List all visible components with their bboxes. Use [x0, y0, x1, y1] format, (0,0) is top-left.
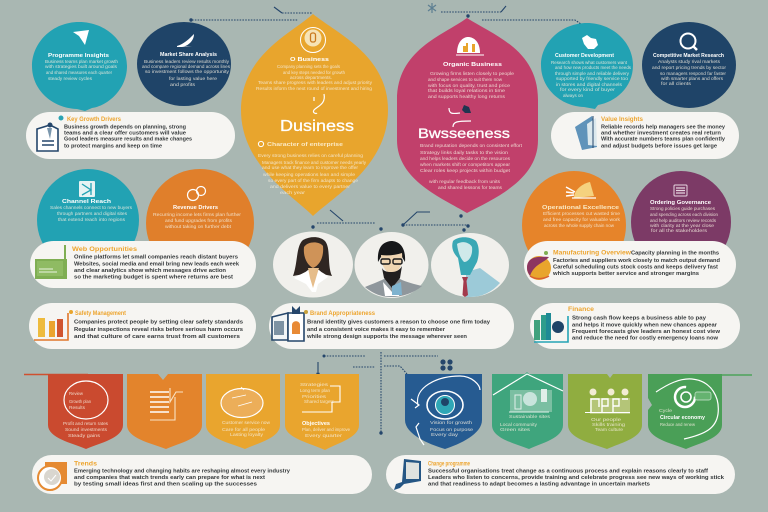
icon: clipboard: [37, 122, 58, 151]
panel: white pill left row 3: and clear analytics show which messages drive action: [74, 268, 226, 274]
panel: purple circle right row 2: and help auditors review records: [650, 218, 717, 223]
panel: white pill right row 4: Frequent forecasts give leaders an honest cost view: [572, 329, 721, 335]
banner lines: [24, 374, 752, 376]
icon: orange check badge: [38, 462, 67, 490]
icon: dome building: [456, 37, 484, 55]
panel: gold leaf business: Managers track finance and customer needs yearly: [262, 160, 367, 165]
panel: lime banner: [568, 374, 642, 449]
panel: white pill right row 4: and reduce the need for costly emergency loans now: [572, 336, 719, 342]
panel: pink leaf business: Organic Business: [443, 62, 502, 68]
panel: white pill right row 4: Finance: [568, 307, 595, 313]
panel: pink leaf business: Brand reputation depends on consistent effort: [420, 143, 523, 148]
panel: white pill centre row 4: [269, 303, 514, 349]
panel: purple circle right row 2: [631, 171, 731, 273]
panel: white pill right row 1: Reliable records help managers see the money: [601, 124, 725, 130]
panel: purple circle right row 2: Ordering Governance: [650, 200, 711, 206]
panel: white pill left row 1: teams and a clear offer customers will value: [64, 130, 186, 136]
panel: white pill left row 1: to protect margins and keep on time: [64, 144, 162, 150]
panel: teal circle left row 2: Channel Reach: [62, 199, 112, 205]
panel: red banner: Review: [69, 391, 84, 396]
panel: gold banner B: Strategies: [300, 382, 329, 387]
panel: pink leaf business: and supports healthy long returns: [428, 94, 506, 99]
panel: teal circle top left: and shared measures each quarter: [46, 70, 112, 75]
panel: white pill right row 1: and whether investment creates real return: [601, 130, 721, 136]
panel: bottom pill right: [386, 455, 735, 494]
panel: white pill right row 1: [551, 112, 739, 159]
panel: navy circle top right: with smarter plans and offers: [661, 76, 724, 81]
panel: white pill left row 3: Online platforms let small companies reach distant buyers: [74, 254, 238, 260]
panel: pink leaf business: with regular feedback from units: [429, 179, 501, 184]
panel: navy circle top right: so managers respond far faster: [660, 71, 726, 76]
panel: gold leaf business: and delivers value to every partner: [270, 184, 351, 189]
panel: teal circle top right: always on: [563, 93, 583, 98]
panel: blue banner: [405, 374, 482, 449]
panel: red banner: Results: [69, 405, 86, 410]
panel: bottom pill left: and companies that watch trends early can prepare for what is next: [74, 475, 265, 481]
panel: white pill left row 4: [29, 303, 256, 349]
icon: chart tile: [79, 181, 95, 197]
panel: teal circle left row 2: through partners and digital sites: [57, 211, 128, 216]
panel: teal circle top right: Customer Development: [555, 53, 614, 59]
panel: bottom pill right: Change programme: [428, 462, 470, 468]
panel: bottom pill left: Emerging technology and changing habits are reshaping almost every industry: [74, 468, 290, 474]
panel: teal circle left row 2: Sales channels connect to new buyers: [50, 205, 133, 210]
panel: white pill right row 3: Careful scheduling cuts stock costs and keeps delivery fast: [553, 264, 718, 270]
panel: navy circle top right: and report pricing trends by sector: [652, 65, 726, 70]
panel: white pill centre row 4: while strong design supports the message wherever seen: [306, 334, 467, 340]
panel: orange circle right row 2: across the whole supply chain now: [544, 223, 615, 228]
panel: white pill right row 3: [524, 241, 736, 288]
panel: teal circle top right: supported by friendly service too: [556, 76, 628, 81]
panel: white pill left row 4: Safety Management: [75, 311, 126, 317]
panel: teal-green banner: [492, 372, 563, 449]
panel: pink leaf business: Strategy links daily tasks to the vision: [420, 150, 509, 155]
panel: white pill right row 3: Factories and suppliers work closely to match output demand: [553, 258, 720, 264]
panel: white pill left row 1: [26, 112, 235, 159]
panel: orange circle left row 2: [146, 169, 254, 277]
panel: gold banner A: Lasting loyalty: [230, 432, 264, 437]
panel: pink leaf business: and shape services to suit them now: [428, 77, 503, 82]
panel: purple circle right row 2: for all the stakeholders: [651, 228, 708, 233]
panel: teal circle top right: in stores and digital channels: [556, 82, 623, 87]
icon: green board: [35, 245, 67, 279]
panel: teal circle top left: steady review cycles: [48, 76, 93, 81]
panel: orange circle left row 2: Revenue Drivers: [173, 205, 218, 211]
panel: white pill right row 4: and helps it move quickly when new chances appear: [572, 322, 718, 328]
panel: red banner: [48, 374, 123, 449]
panel: gold banner B: Priorities: [302, 394, 327, 399]
panel: blue banner: Focus on purpose: [430, 427, 474, 432]
panel: blue banner: Vision for growth: [430, 420, 473, 425]
panel: gold banner B: Shared targets: [304, 399, 335, 404]
panel: gold leaf business: O Business: [290, 57, 329, 63]
panel: gold leaf business: each year: [280, 190, 306, 195]
panel: teal-green banner: Sustainable sites: [509, 414, 551, 419]
panel: purple circle right row 2: with clarity at the year close: [650, 223, 714, 228]
panel: blue banner: Every day: [431, 432, 459, 437]
panel: orange circle left row 2: without taking on further debt: [165, 224, 232, 229]
panel: pink leaf business: [397, 18, 538, 213]
panel: bottom pill right: and that readiness to adapt becomes a lasting advantage in uncertain markets: [428, 482, 650, 488]
panel: purple circle right row 2: Strong policies guide purchases: [650, 206, 716, 211]
panel: gold banner B: Objectives: [302, 421, 330, 427]
panel: gold banner B: [285, 374, 359, 450]
panel: navy circle top right: Analysts study rival markets: [658, 59, 721, 64]
panel: gold leaf business: Dusiness: [280, 118, 354, 135]
panel: white pill left row 1: Good leaders measure results and make changes: [64, 136, 192, 142]
panel: orange circle right row 2: and free capacity for valuable work: [543, 217, 621, 222]
panel: teal circle left row 2: that extend reach into regions: [58, 217, 126, 222]
panel: navy circle top: Market Share Analysis: [160, 52, 217, 58]
panel: white pill centre row 4: and a consistent voice makes it easy to remember: [307, 327, 446, 333]
panel: bottom pill left: Trends: [74, 462, 98, 468]
panel: white pill right row 4: [530, 303, 740, 349]
panel: teal-green banner: Local community: [500, 422, 538, 427]
panel: gold banner A: [206, 374, 280, 449]
panel: pink leaf business: and shared lessons for teams: [438, 185, 503, 190]
panel: white pill centre row 4: Brand identity gives customers a reason to choose one firm today: [307, 320, 490, 326]
avatar: woman: [273, 232, 353, 298]
panel: white pill centre row 4: Brand Appropriateness: [310, 311, 376, 317]
panel: navy circle top: and profits: [170, 82, 196, 87]
panel: gold leaf business: while keeping operations lean and simple: [263, 172, 355, 177]
panel: white pill left row 4: Companies protect people by setting clear safety standards: [74, 320, 243, 326]
panel: teal circle top right: Research shows what customers want: [551, 60, 628, 65]
panel: white pill right row 3: Capacity planning in the months: [631, 250, 719, 256]
panel: gold leaf business: Company planning sets the goals: [277, 64, 341, 69]
panel: bottom pill right: Leaders who listen to concerns, provide training and celebrate progress see new ways of working stick: [428, 475, 724, 481]
panel: gold leaf business: Character of enterprise: [267, 142, 343, 148]
panel: white pill right row 1: and adjust budgets before issues get large: [601, 144, 717, 150]
panel: gold banner A: Customer service now: [222, 420, 271, 425]
panel: white pill right row 4: Strong cash flow keeps a business able to pay: [572, 316, 706, 322]
panel: orange circle right row 2: [522, 171, 626, 279]
panel: gold banner B: Plan, deliver and improve: [302, 427, 350, 432]
panel: navy circle top right: for all clients: [661, 81, 692, 86]
panel: gold leaf business: Results inform the next round of investment and hiring: [256, 86, 372, 91]
panel: pink leaf business: Growing firms listen closely to people: [430, 71, 514, 76]
panel: white pill left row 4: and that culture of care earns trust from all customers: [74, 334, 240, 340]
panel: green banner: Reduce and renew: [660, 422, 696, 427]
panel: lime banner: Our people: [591, 417, 622, 422]
panel: white pill left row 3: [30, 241, 256, 288]
panel: orange circle right row 2: Efficient processes cut wasted time: [543, 211, 620, 216]
panel: bottom pill left: by testing small ideas first and then scaling up the successes: [74, 482, 257, 488]
panel: teal circle top left: Programme Insights: [48, 53, 109, 59]
panel: gold leaf business: [241, 14, 388, 216]
panel: navy circle top: so investment follows the opportunity: [145, 69, 230, 74]
panel: lime banner: Team culture: [595, 427, 623, 432]
icon: gold coin: [300, 28, 326, 52]
icon: blue monitor: [394, 459, 421, 490]
panel: pink leaf business: when markets shift or competitors appear: [420, 162, 510, 167]
icon: teal bar chart with globe: [534, 313, 568, 342]
panel: pink leaf business: with focus on quality, trust and price: [428, 83, 510, 88]
panel: navy circle top: Business leaders review results monthly: [144, 59, 230, 64]
panel: green banner: Cycle: [659, 408, 672, 413]
panel: white pill right row 1: With accurate numbers teams plan confidently: [601, 136, 725, 142]
panel: green banner: Circular economy: [660, 415, 706, 421]
panel: pink leaf business: Clear roles keep projects within budget: [420, 168, 511, 173]
panel: bottom pill right: Successful organisations treat change as a continuous process and explain reasons clearly to staff: [428, 468, 708, 474]
panel: lime banner: Skills training: [592, 422, 626, 427]
panel: teal circle top left: with strategies built around goals: [45, 64, 118, 69]
panel: green banner: [648, 374, 722, 449]
connectors: dotted lines: [189, 3, 581, 435]
panel: navy circle top: for lasting value here: [169, 76, 217, 81]
panel: white pill left row 4: Regular inspections reveal risks before serious harm occurs: [74, 327, 243, 333]
panel: red banner: Steady gains: [68, 433, 101, 438]
panel: bottom pill left: [32, 455, 372, 494]
panel: gold banner B: Every quarter: [305, 433, 343, 438]
icon: open book: [272, 306, 304, 341]
icon: pie ball: [527, 256, 551, 280]
panel: pink leaf business: and helps leaders decide on the resources: [420, 156, 511, 161]
panel: navy circle top: and compare regional demand across lines: [142, 64, 231, 69]
panel: gold leaf business: and key steps needed for growth: [283, 70, 345, 75]
panel: teal circle top left: Business teams plan market growth: [45, 59, 118, 64]
panel: teal circle left row 2: [37, 169, 139, 271]
panel: white pill left row 1: Business growth depends on planning, strong: [64, 124, 186, 130]
panel: navy circle top right: Competitive Market Research: [653, 53, 725, 59]
panel: teal circle top right: and how new products meet the needs: [555, 65, 632, 70]
panel: orange banner: [127, 374, 202, 449]
icon: bar chart: [34, 313, 68, 340]
panel: gold leaf business: across departments.: [290, 75, 332, 80]
panel: gold leaf business: Every strong business relies on careful planning: [258, 153, 363, 158]
panel: white pill left row 3: Websites, social media and email bring new leads each week: [74, 262, 239, 268]
panel: teal circle top right: for every kind of buyer: [560, 87, 616, 92]
panel: gold banner B: Long term plan: [300, 388, 330, 393]
panel: white pill right row 3: Manufacturing Overview: [553, 250, 631, 256]
panel: gold leaf business: and use what they learn to improve the offer: [262, 165, 359, 170]
panel: teal-green banner: Green sites: [500, 427, 531, 432]
panel: red banner: Growth plan: [69, 399, 91, 404]
panel: white pill right row 1: Value Insights: [601, 117, 644, 123]
panel: teal circle top right: [541, 23, 633, 109]
panel: white pill left row 3: Web Opportunities: [72, 247, 138, 253]
panel: purple circle right row 2: and spending across each division: [650, 212, 718, 217]
panel: white pill left row 1: Key Growth Drivers: [67, 117, 122, 123]
panel: white pill left row 3: so the marketing budget is spent where returns are best: [74, 274, 233, 280]
panel: navy circle top: [137, 22, 231, 106]
panel: orange circle right row 2: Operational Excellence: [542, 205, 619, 211]
panel: gold banner A: Care for all people: [222, 427, 265, 432]
avatar: teal profile man: [431, 233, 509, 297]
panel: red banner: Sound investments: [65, 427, 108, 432]
panel: red banner: Profit and return rates: [63, 421, 109, 426]
panel: teal circle top left: [32, 22, 127, 111]
panel: pink leaf business: Bwsseeness: [418, 125, 510, 141]
avatar: man with glasses: [354, 232, 428, 298]
panel: orange circle left row 2: and fund upgrades from profits: [165, 218, 233, 223]
panel: gold leaf business: Teams share progress with leaders and adjust priority: [258, 80, 373, 85]
icon: open folder: [575, 116, 597, 150]
panel: orange circle left row 2: Recurring income lets firms plan further: [153, 212, 242, 217]
panel: pink leaf business: that builds loyal relations in time: [428, 88, 506, 93]
panel: teal circle top right: through simple and reliable delivery: [555, 71, 630, 76]
panel: navy circle top right: [642, 22, 736, 108]
panel: gold leaf business: so every part of the firm adapts to change: [268, 178, 358, 183]
panel: white pill right row 3: which supports better service and stronger margins: [552, 271, 699, 277]
